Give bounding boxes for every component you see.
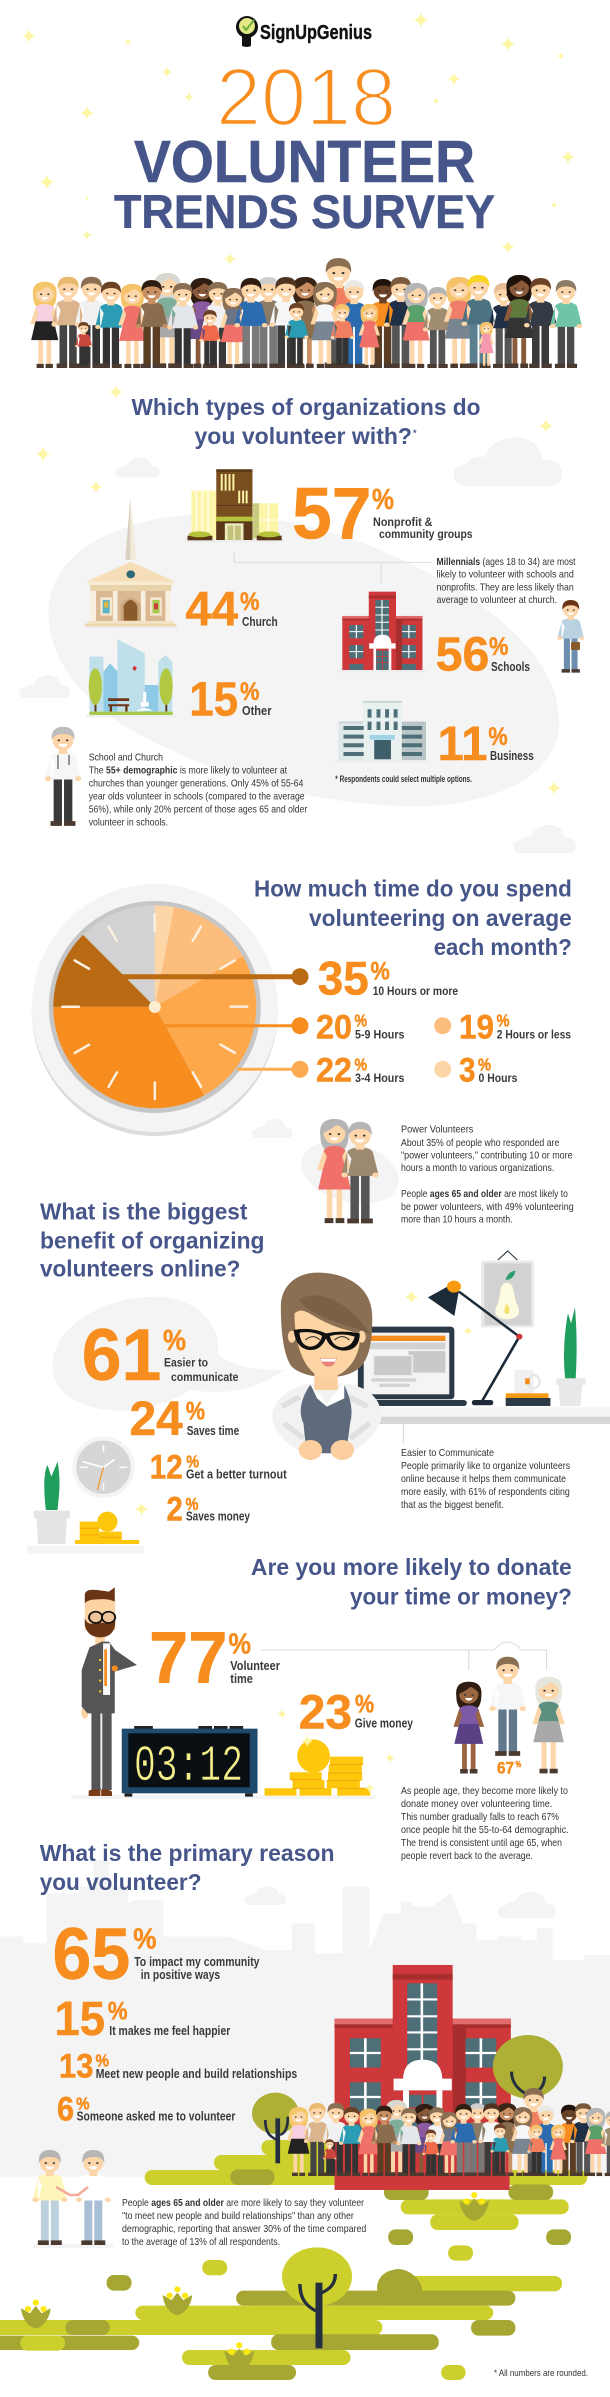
stat: 15%: It makes me feel happier <box>109 2024 230 2038</box>
icon: light bulb <box>236 16 258 47</box>
title: VOLUNTEER <box>134 129 475 195</box>
stat: 67%: 67 <box>497 1759 514 1777</box>
digital clock case <box>122 1726 258 1797</box>
clouds <box>243 1886 556 1918</box>
heading: What is the biggest <box>40 1198 248 1224</box>
sparkles <box>277 1709 395 1793</box>
wedge: 3% 0 hours <box>155 905 174 1007</box>
panel: time or money <box>71 1554 572 1862</box>
text: relationships note: "to meet new people and build relationships" than any other <box>122 2210 354 2222</box>
lotus plants <box>21 2192 489 2371</box>
shelf with plant and coins <box>27 1462 144 1553</box>
stat: 19%: 2 Hours or less <box>497 1029 571 1041</box>
stat: 44% church: Church <box>242 614 278 629</box>
stat: 15%: % <box>108 1997 128 2025</box>
stat: 65% <box>52 1914 260 1995</box>
text: age trend note: donate money over volunteering time. <box>401 1798 552 1810</box>
stat: 44% church: 44 <box>186 584 238 637</box>
title <box>114 52 495 239</box>
text: school and church note <box>89 752 308 829</box>
stat: 13%: Meet new people and build relationships <box>96 2067 297 2081</box>
panel: benefit of organizing online <box>27 1198 610 1553</box>
stat: 35% <box>318 951 458 1004</box>
figures: three age groups <box>453 1657 565 1773</box>
coin stacks <box>265 1739 370 1796</box>
stat: 61%: Easier to <box>164 1358 208 1370</box>
stat: 57% nonprofit: Nonprofit & <box>373 517 432 529</box>
text: relationships note: demographic, reporting that answer 30% of the time compared <box>122 2223 366 2235</box>
text: power volunteers note: "power volunteers," contributing 10 or more <box>401 1149 573 1161</box>
stat: 15%: 15 <box>54 1993 105 2046</box>
stat: 56% schools <box>436 629 530 682</box>
text: power volunteers note: be power volunteers, with 49% volunteering <box>401 1201 574 1213</box>
stat: 22%: 3-4 Hours <box>355 1073 404 1085</box>
text: power volunteers note: Power Volunteers <box>401 1124 473 1136</box>
stat: 23% give money: % <box>355 1691 374 1719</box>
stat: 57% nonprofit: 57 <box>292 473 372 554</box>
panel: time spent <box>32 876 574 1226</box>
text: relationships note <box>122 2197 366 2248</box>
sparkles <box>135 1290 473 1516</box>
stat: 20%: 5-9 Hours <box>355 1029 404 1041</box>
stat: 15% other: 15 <box>189 674 238 727</box>
icon: city park <box>86 639 176 717</box>
stat: 57% nonprofit: % <box>372 484 394 516</box>
stat: 44% church <box>186 584 278 637</box>
stat: 61%: % <box>163 1325 186 1357</box>
icon: church <box>84 497 178 629</box>
stat: 24% <box>130 1393 239 1446</box>
panel: reasons to volunteer <box>0 1840 610 2380</box>
stat: 3%: 0 Hours <box>478 1073 517 1085</box>
age bracket connector <box>261 1642 547 1670</box>
heading: What is the primary reason <box>40 1840 334 1866</box>
stat: 6%: Someone asked me to volunteer <box>77 2110 236 2124</box>
stat: 15% other: % <box>240 678 260 706</box>
text: power volunteers note: People ages 65 and older are most likely to <box>401 1188 568 1200</box>
stat: 35%: % <box>370 957 390 985</box>
crowd of volunteers near building <box>287 2088 610 2176</box>
figure: bearded man with digital clock and coins <box>71 1587 377 1799</box>
heading: Are you more likely to donate <box>251 1554 572 1580</box>
laptop <box>358 1327 467 1406</box>
stat: 77% volunteer time: 77 <box>149 1618 228 1699</box>
stat: 56% schools: % <box>489 633 508 661</box>
footnote: multiple options: * Respondents could select multiple options. <box>335 774 472 784</box>
stat: 6%: 6 <box>57 2091 74 2129</box>
wedge: 19% 2 hours or less <box>155 907 243 1007</box>
text: millennials note: average to volunteer at church. <box>436 594 557 606</box>
stat: 67%: % <box>515 1760 521 1769</box>
text: easier to communicate note: that as the biggest benefit. <box>401 1499 504 1511</box>
icon: nonprofit building <box>185 469 284 542</box>
stat: 20% <box>316 1008 404 1046</box>
text: millennials note: likely to volunteer with schools and <box>436 569 574 581</box>
stat: 35%: 35 <box>318 951 369 1004</box>
stat: 15% <box>54 1993 230 2046</box>
heading: you volunteer? <box>40 1869 202 1895</box>
header sparkles <box>22 12 575 266</box>
desk with laptop, lamp and decor <box>350 1251 610 1444</box>
potted plant <box>556 1307 585 1406</box>
stat: 12%: % <box>186 1451 199 1471</box>
stat: 11% business: 11 <box>438 718 487 771</box>
stat: 24%: Saves time <box>187 1424 239 1438</box>
footnote: rounded numbers: * All numbers are rounded. <box>494 2368 588 2379</box>
text: easier to communicate note: People primarily like to organize volunteers <box>401 1460 570 1472</box>
text: easier to communicate note <box>401 1447 570 1511</box>
text: millennials note <box>436 556 576 606</box>
text: school and church note: year olds volunteer in schools (compared to the average <box>89 791 305 803</box>
stat: 12%: Get a better turnout <box>186 1468 287 1482</box>
background blob <box>49 513 559 807</box>
text: age trend note: This number gradually falls to reach 67% <box>401 1811 559 1823</box>
stat: 15% other <box>189 674 272 727</box>
stat: 6%: % <box>76 2093 90 2113</box>
stat: 3%: 3 <box>459 1052 476 1090</box>
heading: your time or money? <box>350 1583 572 1609</box>
stat: 13%: 13 <box>59 2048 93 2086</box>
heading: volunteering on average <box>309 905 572 931</box>
text: easier to communicate note: more easily, with 61% of respondents citing <box>401 1486 570 1498</box>
stat: 57% nonprofit <box>292 473 473 554</box>
stat: 19%: % <box>496 1011 510 1031</box>
text: millennials note: Millennials (ages 18 to 34) are most <box>436 556 576 568</box>
stat: 65%: % <box>133 1923 157 1955</box>
stat: 56% schools: Schools <box>491 659 530 674</box>
heading: Which types of organizations do <box>132 394 480 420</box>
green landscape <box>0 2140 587 2380</box>
stat: 13%: % <box>96 2051 109 2071</box>
center tree <box>282 2247 352 2348</box>
heading <box>254 876 572 960</box>
heading: * <box>413 428 417 438</box>
text: school and church note: School and Church <box>89 752 163 764</box>
stat: 56% schools: 56 <box>436 629 489 682</box>
stat: 77% volunteer time: time <box>230 1672 253 1686</box>
stat: 2%: Saves money <box>186 1510 250 1524</box>
building behind crowd <box>326 1965 519 2190</box>
heading: How much time do you spend <box>254 876 572 902</box>
logo: SignUpGenius <box>236 16 372 47</box>
heading: each month? <box>434 934 572 960</box>
stat: 20%: % <box>354 1011 367 1031</box>
icon: business office <box>335 701 430 763</box>
stat: 35%: 10 Hours or more <box>373 986 458 998</box>
text: age trend note: once people hit the 55-to-64 demographic. <box>401 1824 569 1836</box>
sparkles <box>35 385 561 795</box>
stat: 65%: To impact my community <box>134 1955 260 1969</box>
stat: 2%: % <box>186 1494 199 1514</box>
heading: volunteers online? <box>40 1256 240 1282</box>
stat: 12% <box>150 1448 287 1486</box>
stat: 20%: 20 <box>316 1008 352 1046</box>
icon: school <box>338 592 426 673</box>
text: millennials note: nonprofits. They are less likely than <box>436 582 574 594</box>
bearded man <box>81 1587 137 1796</box>
stat: 19%: 19 <box>459 1008 494 1046</box>
crowd of volunteers <box>30 258 582 368</box>
stat: 11% business <box>438 718 534 771</box>
figure: smiling woman <box>272 1273 381 1460</box>
stat: 77% volunteer time: Volunteer <box>230 1659 280 1673</box>
stat: 22%: 22 <box>316 1052 352 1090</box>
stat: 65%: in positive ways <box>141 1968 220 1982</box>
stat: 65%: 65 <box>52 1914 130 1995</box>
title: TRENDS SURVEY <box>114 186 495 239</box>
stat: 61% <box>82 1315 238 1396</box>
figure: millennial man <box>557 600 584 673</box>
heading <box>132 394 480 449</box>
desk lamp <box>428 1281 522 1405</box>
bush <box>377 2269 422 2291</box>
stat: 57% nonprofit: community groups <box>379 529 473 541</box>
stat: 11% business: Business <box>490 748 534 763</box>
framed pear picture <box>481 1251 534 1327</box>
stat: 23% give money <box>299 1686 413 1739</box>
text: age trend note: The trend is consistent until age 65, when <box>401 1837 562 1849</box>
stat: 6% <box>57 2091 236 2129</box>
stat: 24%: 24 <box>130 1393 183 1446</box>
wedge: 22% 3-4 hours <box>155 956 256 1096</box>
pie clock chart <box>32 884 278 1136</box>
logo: SignUpGenius: SignUpGenius <box>260 22 372 44</box>
text: school and church note: churches than younger generations. Only 45% of 55-64 <box>89 778 304 790</box>
stat: 44% church: % <box>240 588 260 616</box>
heading: benefit of organizing <box>40 1227 264 1253</box>
stat: 23% give money: Give money <box>355 1717 413 1731</box>
stat: 13% <box>59 2048 297 2086</box>
text: relationships note: People ages 65 and older are more likely to say they volunteer <box>122 2197 364 2209</box>
wedge: 35% 10 hours or more <box>53 935 155 1007</box>
text: school and church note: The 55+ demographic is more likely to volunteer at <box>89 765 287 777</box>
icon: wall clock <box>72 1436 135 1498</box>
stat: 15% other: Other <box>242 703 272 718</box>
stat: 19% <box>459 1008 571 1046</box>
city skyline background <box>0 1860 610 2177</box>
text: easier to communicate note: online because it helps them communicate <box>401 1473 566 1485</box>
stat: 2%: 2 <box>166 1491 183 1529</box>
cloud <box>252 1119 292 1138</box>
stat: 24%: % <box>186 1397 205 1425</box>
stat: 23% give money: 23 <box>299 1686 352 1739</box>
mug and books <box>506 1370 550 1406</box>
heading <box>40 1840 334 1895</box>
clock digits: 03:12 <box>134 1739 243 1796</box>
title: 2018 <box>216 52 396 143</box>
figures: older pair shaking hands <box>32 2150 113 2248</box>
text: age trend note: As people age, they become more likely to <box>401 1785 568 1797</box>
figure: doctor <box>45 727 81 826</box>
text: power volunteers note <box>401 1124 574 1226</box>
speech bubble <box>53 1297 284 1411</box>
text: power volunteers note: About 35% of people who responded are <box>401 1137 559 1149</box>
stat: 22%: % <box>354 1055 367 1075</box>
heading <box>40 1198 264 1282</box>
text: easier to communicate note: Easier to Communicate <box>401 1447 494 1459</box>
stat: 61%: 61 <box>82 1315 161 1396</box>
stat: 3% <box>459 1052 517 1090</box>
text: age trend note: people revert back to the average. <box>401 1850 533 1862</box>
text: school and church note: 56%), while only 20% percent of those ages 65 and older <box>89 804 308 816</box>
stat: 11% business: % <box>488 723 508 751</box>
wedge: 20% 5-9 hours <box>53 1007 204 1108</box>
stat: 3%: % <box>478 1055 491 1075</box>
text: relationships note: to the average of 13% of all respondents. <box>122 2236 280 2248</box>
text: power volunteers note: hours a month to various organizations. <box>401 1162 554 1174</box>
stat: 77% volunteer time: % <box>228 1628 251 1660</box>
stat: 22% <box>316 1052 404 1090</box>
stat: 77% volunteer time <box>149 1618 280 1699</box>
text: age trend note <box>401 1785 569 1862</box>
clouds <box>19 437 576 853</box>
stat: 2% <box>166 1491 250 1529</box>
trees <box>252 2035 563 2163</box>
connector lines <box>234 552 432 583</box>
heading <box>251 1554 572 1609</box>
heading: you volunteer with? <box>194 423 412 449</box>
figure: older couple <box>294 1119 406 1223</box>
text: school and church note: volunteer in schools. <box>89 817 168 829</box>
panel: organization types <box>19 385 584 853</box>
leader lines <box>122 968 451 1078</box>
stat: 61%: communicate <box>171 1372 238 1384</box>
text: power volunteers note: more than 10 hours a month. <box>401 1214 513 1226</box>
stat: 12%: 12 <box>150 1448 183 1486</box>
clock ticks <box>61 913 249 1100</box>
